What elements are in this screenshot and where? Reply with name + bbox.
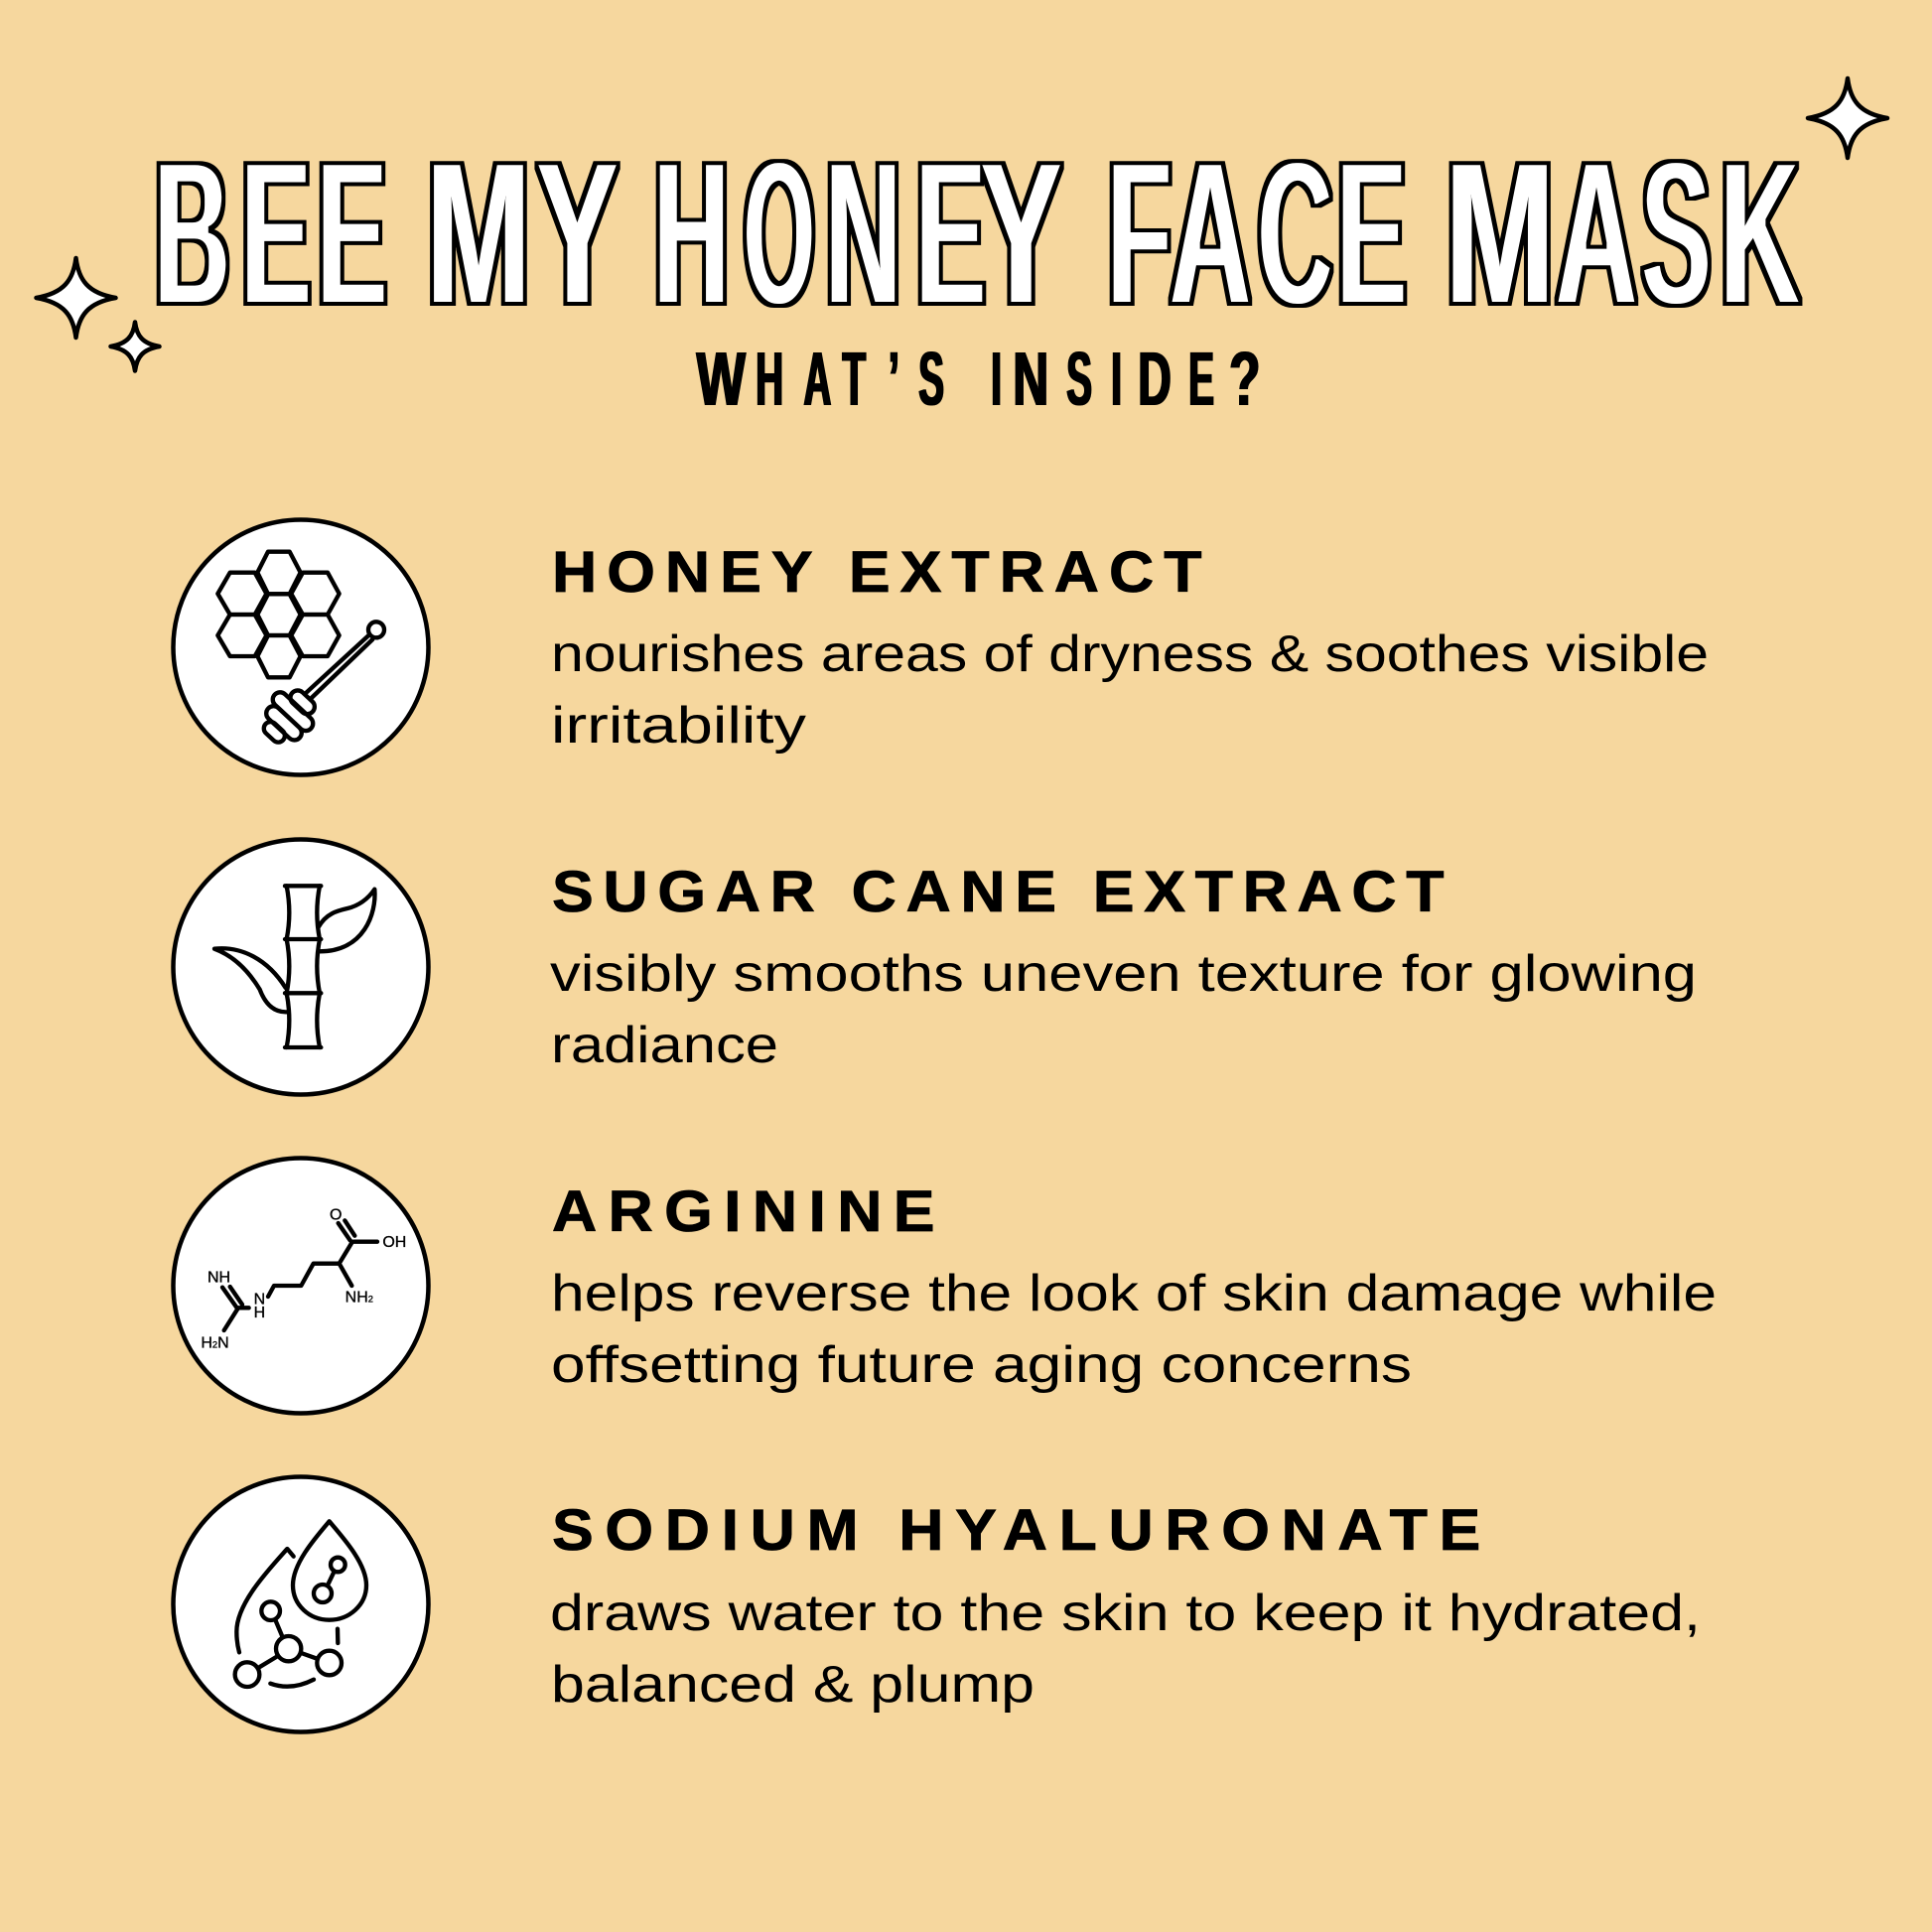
subtitle: W HAT’S IN SID E? [697, 336, 1261, 421]
heading: sodium hyaluronate: SODIUM HYALURONATE [552, 1497, 1480, 1562]
panel: sodium hyaluronate [173, 1477, 1701, 1731]
icon circle: arginine molecule: O [330, 1206, 342, 1223]
icon circle: arginine molecule: H2N [201, 1334, 229, 1351]
title: BEE MY HONEY FACE MASK [155, 118, 1801, 350]
heading: honey extract: HONEY EXTRACT [552, 539, 1202, 604]
description: honey extract: nourishes areas of dryness & soothes visible [551, 625, 1709, 683]
icon circle: water drop and molecule [173, 1477, 429, 1731]
icon circle: arginine molecule: H [254, 1305, 265, 1321]
icon: small sparkle left [111, 322, 159, 371]
icon: sparkle top right [1808, 78, 1887, 158]
icon: large sparkle left [36, 258, 115, 338]
panel: sugar cane extract [173, 840, 1697, 1094]
description: arginine: offsetting future aging concerns [551, 1336, 1412, 1394]
panel: honey extract [173, 520, 1709, 774]
description: sugar cane extract: radiance [551, 1017, 778, 1074]
icon circle: sugar cane [173, 840, 429, 1094]
description: sugar cane extract [550, 945, 1697, 1074]
description: sodium hyaluronate: balanced & plump [551, 1656, 1035, 1714]
description: sodium hyaluronate [550, 1585, 1701, 1714]
icon circle: arginine molecule: NH2 [345, 1289, 373, 1306]
description: arginine [551, 1265, 1717, 1394]
heading: arginine: ARGININE [552, 1178, 935, 1243]
icon circle: arginine molecule: N [254, 1291, 265, 1308]
heading: sugar cane extract: SUGAR CANE EXTRACT [552, 859, 1445, 923]
description: sugar cane extract: visibly smooths uneven texture for glowing [550, 945, 1697, 1003]
description: arginine: helps reverse the look of skin damage while [551, 1265, 1717, 1322]
description: honey extract: irritability [551, 697, 806, 755]
icon circle: honeycomb and dipper [173, 520, 429, 774]
description: sodium hyaluronate: draws water to the skin to keep it hydrated, [550, 1585, 1701, 1642]
icon circle: arginine molecule: NH [207, 1270, 230, 1287]
description: honey extract [551, 625, 1709, 755]
icon circle: arginine molecule: OH [382, 1234, 406, 1251]
icon circle: arginine molecule [173, 1158, 429, 1414]
panel: arginine [173, 1158, 1717, 1414]
